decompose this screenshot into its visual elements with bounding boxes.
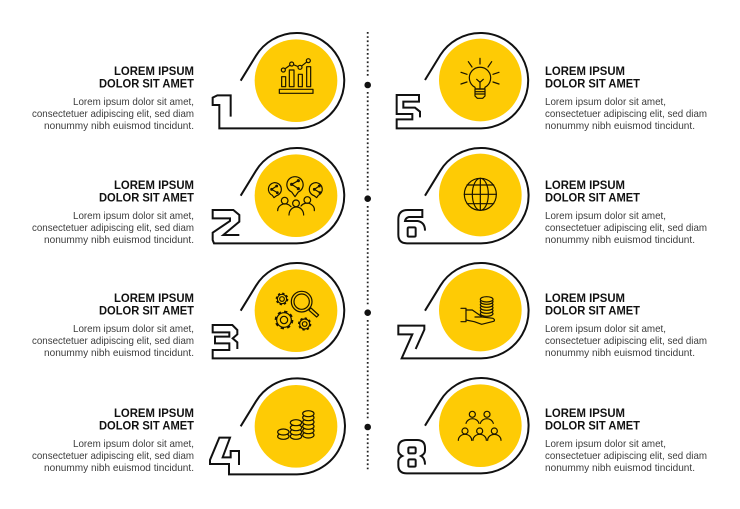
text block 4: Lorem ipsum dolor sit amet, [73,438,194,450]
number 5 outline [397,33,528,128]
text block 8: consectetuer adipiscing elit, sed diam [545,450,707,462]
step 7 [398,263,529,358]
text block 4: nonummy nibh euismod tincidunt. [44,462,194,474]
text block 8 [545,406,707,474]
number 6 counter [408,227,416,237]
text block 1: DOLOR SIT AMET [99,76,195,90]
number 1 outline [213,33,344,128]
text block 1: consectetuer adipiscing elit, sed diam [32,108,194,120]
step 2 [213,148,344,243]
text block 4 [32,406,195,474]
number 4 outline [210,378,345,474]
text block 8: LOREM IPSUM [545,406,625,420]
text block 6: DOLOR SIT AMET [545,190,641,204]
icon: light bulb [461,58,499,98]
number 8 outline [398,378,529,473]
text block 1: LOREM IPSUM [114,64,194,78]
text block 5: Lorem ipsum dolor sit amet, [545,96,666,108]
text block 6: Lorem ipsum dolor sit amet, [545,210,666,222]
step 5 [397,33,528,128]
text block 8: Lorem ipsum dolor sit amet, [545,438,666,450]
icon: coin stacks [278,411,314,439]
text block 4: consectetuer adipiscing elit, sed diam [32,450,194,462]
text block 7 [545,291,707,359]
step 6 [398,148,529,243]
icon: globe [464,178,496,210]
text block 4: DOLOR SIT AMET [99,418,195,432]
text block 1: nonummy nibh euismod tincidunt. [44,120,194,132]
icon: bar chart [279,59,313,93]
number 3 outline [213,263,344,358]
text block 5: LOREM IPSUM [545,64,625,78]
text block 5: consectetuer adipiscing elit, sed diam [545,108,707,120]
text block 7: nonummy nibh euismod tincidunt. [545,347,695,359]
text block 4: LOREM IPSUM [114,406,194,420]
text block 2: nonummy nibh euismod tincidunt. [44,234,194,246]
text block 5: DOLOR SIT AMET [545,76,641,90]
text block 5: nonummy nibh euismod tincidunt. [545,120,695,132]
icon: group of people [458,411,501,440]
step 1 [213,33,344,128]
text block 8: DOLOR SIT AMET [545,418,641,432]
text block 6: LOREM IPSUM [545,178,625,192]
text block 2 [32,178,195,246]
text block 6: nonummy nibh euismod tincidunt. [545,234,695,246]
text block 3 [32,291,195,359]
icon: hand with coins [461,297,495,324]
text block 2: Lorem ipsum dolor sit amet, [73,210,194,222]
text block 6 [545,178,707,246]
icon: people sharing [268,177,322,215]
text block 2: LOREM IPSUM [114,178,194,192]
text block 2: DOLOR SIT AMET [99,190,195,204]
text block 7: DOLOR SIT AMET [545,304,641,318]
text block 7: consectetuer adipiscing elit, sed diam [545,335,707,347]
number 6 outline [398,148,529,243]
center timeline [364,32,371,470]
text block 1 [32,64,195,132]
step 3 [213,263,344,358]
icon: gears and magnifier [276,291,319,329]
text block 5 [545,64,707,132]
number 7 outline [398,263,529,358]
text block 7: LOREM IPSUM [545,291,625,305]
text block 3: consectetuer adipiscing elit, sed diam [32,335,194,347]
text block 7: Lorem ipsum dolor sit amet, [545,323,666,335]
text block 6: consectetuer adipiscing elit, sed diam [545,222,707,234]
number 8 counters [408,447,416,467]
step 8 [398,378,529,473]
text block 8: nonummy nibh euismod tincidunt. [545,462,695,474]
text block 3: DOLOR SIT AMET [99,304,195,318]
text block 1: Lorem ipsum dolor sit amet, [73,96,194,108]
text block 3: LOREM IPSUM [114,291,194,305]
text block 3: nonummy nibh euismod tincidunt. [44,347,194,359]
text block 3: Lorem ipsum dolor sit amet, [73,323,194,335]
number 2 outline [213,148,344,243]
step 4 [210,378,345,474]
text block 2: consectetuer adipiscing elit, sed diam [32,222,194,234]
